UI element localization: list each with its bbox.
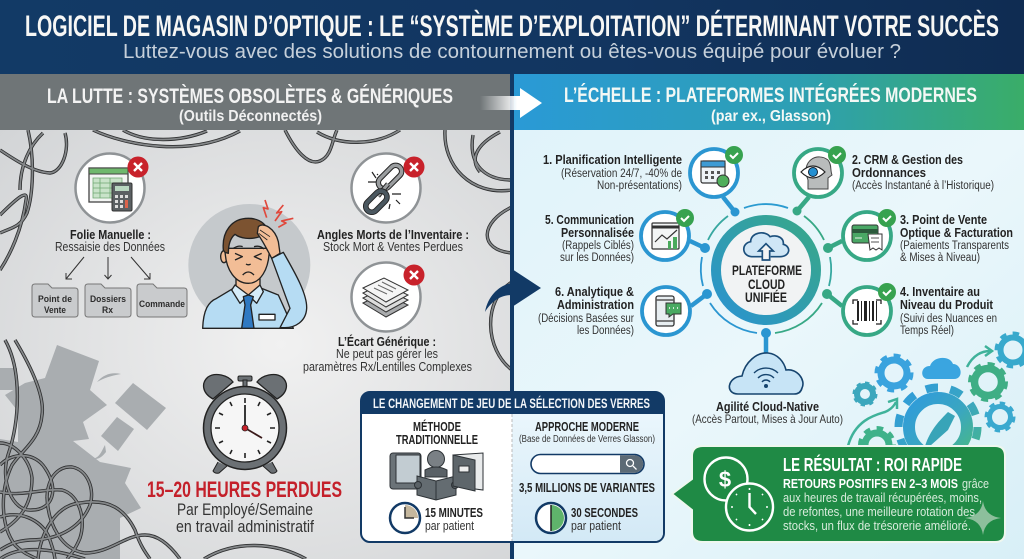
icon: stressed employee <box>188 200 310 328</box>
callout: result ROI: LE RÉSULTAT : ROI RAPIDE <box>783 454 962 475</box>
text: folie manuelle: Ressaisie des Données <box>55 240 165 254</box>
hub: unified cloud platform <box>701 204 831 333</box>
callout: result ROI: aux heures de travail récupérées, moins, <box>783 491 982 505</box>
icon: 15 minute clock <box>390 503 420 533</box>
badge: error <box>404 264 424 286</box>
feature 3: point of sale: 3. Point de Vente <box>900 212 987 227</box>
callout: result ROI: grâce <box>962 477 989 491</box>
tangled cables <box>0 130 512 559</box>
icon: paper stack <box>352 262 420 332</box>
callout: hours lost: 15–20 HEURES PERDUES <box>147 477 342 502</box>
icon: money and time <box>704 458 773 530</box>
callout: result ROI: de refontes, une meilleure rotation des <box>783 505 975 519</box>
hub: unified cloud platform: CLOUD <box>748 276 785 292</box>
text: écart générique: L’Écart Générique : <box>338 334 436 349</box>
text: angles morts <box>317 227 469 254</box>
feature 2: CRM: 2. CRM & Gestion des <box>852 152 963 167</box>
modern approach: par patient <box>571 519 621 533</box>
folders: Rx <box>102 305 114 316</box>
hub connectors <box>690 197 842 356</box>
text: angles morts: Stock Mort & Ventes Perdues <box>323 240 463 254</box>
traditional method: par patient <box>425 519 474 533</box>
hub: unified cloud platform: UNIFIÉE <box>745 289 787 305</box>
feature 6: analytics: 6. Analytique & <box>555 284 634 299</box>
feature 4: inventory: (Suivi des Nuances en <box>900 313 997 325</box>
panel: lens selection game changer <box>361 392 664 542</box>
icon: broken chain <box>352 154 420 222</box>
feature 4: inventory: Temps Réel) <box>900 325 954 337</box>
feature 6: analytics: Administration <box>557 297 634 312</box>
central divider <box>510 74 514 559</box>
folders: Point de <box>38 294 72 305</box>
background gear and papers silhouette <box>0 345 166 559</box>
hub: unified cloud platform: PLATEFORME <box>732 262 802 278</box>
hub connector dots <box>700 206 833 338</box>
text: écart générique: Ne peut pas gérer les <box>336 347 438 361</box>
feature 1: scheduling <box>543 146 743 197</box>
feature 1: scheduling: 1. Planification Intelligente <box>543 152 682 167</box>
subtitle: Luttez-vous avec des solutions de contournement ou êtes-vous équipé pour évoluer ? <box>123 41 901 63</box>
folders <box>32 284 187 317</box>
callout: result ROI: RETOURS POSITIFS EN 2–3 MOIS <box>783 477 958 491</box>
callout: result ROI: stocks, un flux de trésorerie amélioré. <box>783 519 971 533</box>
arrows to folders <box>66 257 150 279</box>
panel header: la lutte <box>0 74 510 130</box>
callout: result ROI <box>672 446 1005 542</box>
gears decoration <box>848 334 1024 466</box>
panel header: la lutte: (Outils Déconnectés) <box>179 108 322 125</box>
callout: hours lost: Par Employé/Semaine <box>177 501 313 519</box>
box title: LE CHANGEMENT DE JEU DE LA SÉLECTION DES VERRES <box>373 396 650 411</box>
text: cloud-native agility: Agilité Cloud-Native <box>716 399 819 414</box>
feature 6: analytics: (Décisions Basées sur <box>538 313 634 325</box>
feature 3: point of sale: & Mises à Niveau) <box>900 252 980 264</box>
feature 2: CRM <box>794 146 994 197</box>
icon: alarm clock <box>204 375 286 473</box>
feature 4: inventory <box>843 283 997 337</box>
callout: hours lost: en travail administratif <box>176 518 314 536</box>
header band <box>0 0 1024 75</box>
modern approach: 30 SECONDES <box>571 506 638 520</box>
badge: error <box>404 156 424 178</box>
stress bolts <box>263 200 293 227</box>
traditional method: MÉTHODE <box>413 419 461 434</box>
icon: cloud wifi <box>729 353 803 394</box>
feature 5: communication: sur les Données) <box>560 252 634 264</box>
panel: la lutte <box>0 130 512 559</box>
feature 5: communication: (Rappels Ciblés) <box>562 240 634 252</box>
icon: reader with books <box>390 450 483 500</box>
text: écart générique: paramètres Rx/Lentilles Complexes <box>303 360 472 374</box>
icon: spreadsheet and calculator <box>76 154 144 222</box>
traditional method: TRADITIONNELLE <box>396 433 478 447</box>
text: cloud-native agility: (Accès Partout, Mises à Jour Auto) <box>692 412 843 426</box>
panel header: l'échelle: (par ex., Glasson) <box>711 108 831 125</box>
icon: 30 second clock <box>536 503 566 533</box>
modern approach <box>519 420 655 533</box>
arrow: dark curved transition <box>485 269 541 312</box>
feature 2: CRM: Ordonnances <box>852 165 926 180</box>
feature 6: analytics: les Données) <box>577 325 634 337</box>
feature 5: communication: 5. Communication <box>545 212 634 227</box>
search bar <box>531 454 644 474</box>
panel: l'échelle <box>514 130 1024 559</box>
panel header: la lutte: LA LUTTE : SYSTÈMES OBSOLÈTES & GÉNÉRIQUES <box>47 85 453 108</box>
icon: money and time: $ <box>719 467 731 492</box>
badge: error <box>128 156 148 178</box>
modern approach: APPROCHE MODERNE <box>535 420 639 434</box>
text: folie manuelle <box>55 227 165 254</box>
feature 5: communication <box>545 209 694 264</box>
folders: Dossiers <box>90 294 126 305</box>
feature 1: scheduling: Non-présentations) <box>597 180 682 192</box>
text: cloud-native agility <box>692 399 843 426</box>
callout: hours lost <box>147 477 342 536</box>
arrow: transition between headers <box>480 88 542 118</box>
feature 3: point of sale <box>843 209 1013 264</box>
folders: Commande <box>139 299 185 310</box>
feature 2: CRM: (Accès Instantané à l’Historique) <box>852 180 994 192</box>
traditional method <box>390 419 483 533</box>
text: angles morts: Angles Morts de l’Inventaire : <box>317 227 469 242</box>
modern approach: (Base de Données de Verres Glasson) <box>519 434 655 445</box>
folders: Vente <box>44 305 66 316</box>
feature 6: analytics <box>538 284 690 337</box>
feature 1: scheduling: (Réservation 24/7, -40% de <box>561 168 682 180</box>
feature 4: inventory: Niveau du Produit <box>900 297 994 312</box>
text: écart générique <box>303 334 472 374</box>
traditional method: 15 MINUTES <box>425 506 483 520</box>
text: folie manuelle: Folie Manuelle : <box>70 227 151 242</box>
feature 4: inventory: 4. Inventaire au <box>900 284 980 299</box>
modern approach: 3,5 MILLIONS DE VARIANTES <box>519 481 655 495</box>
feature 5: communication: Personnalisée <box>561 225 634 240</box>
panel header: l'échelle <box>514 74 1024 130</box>
